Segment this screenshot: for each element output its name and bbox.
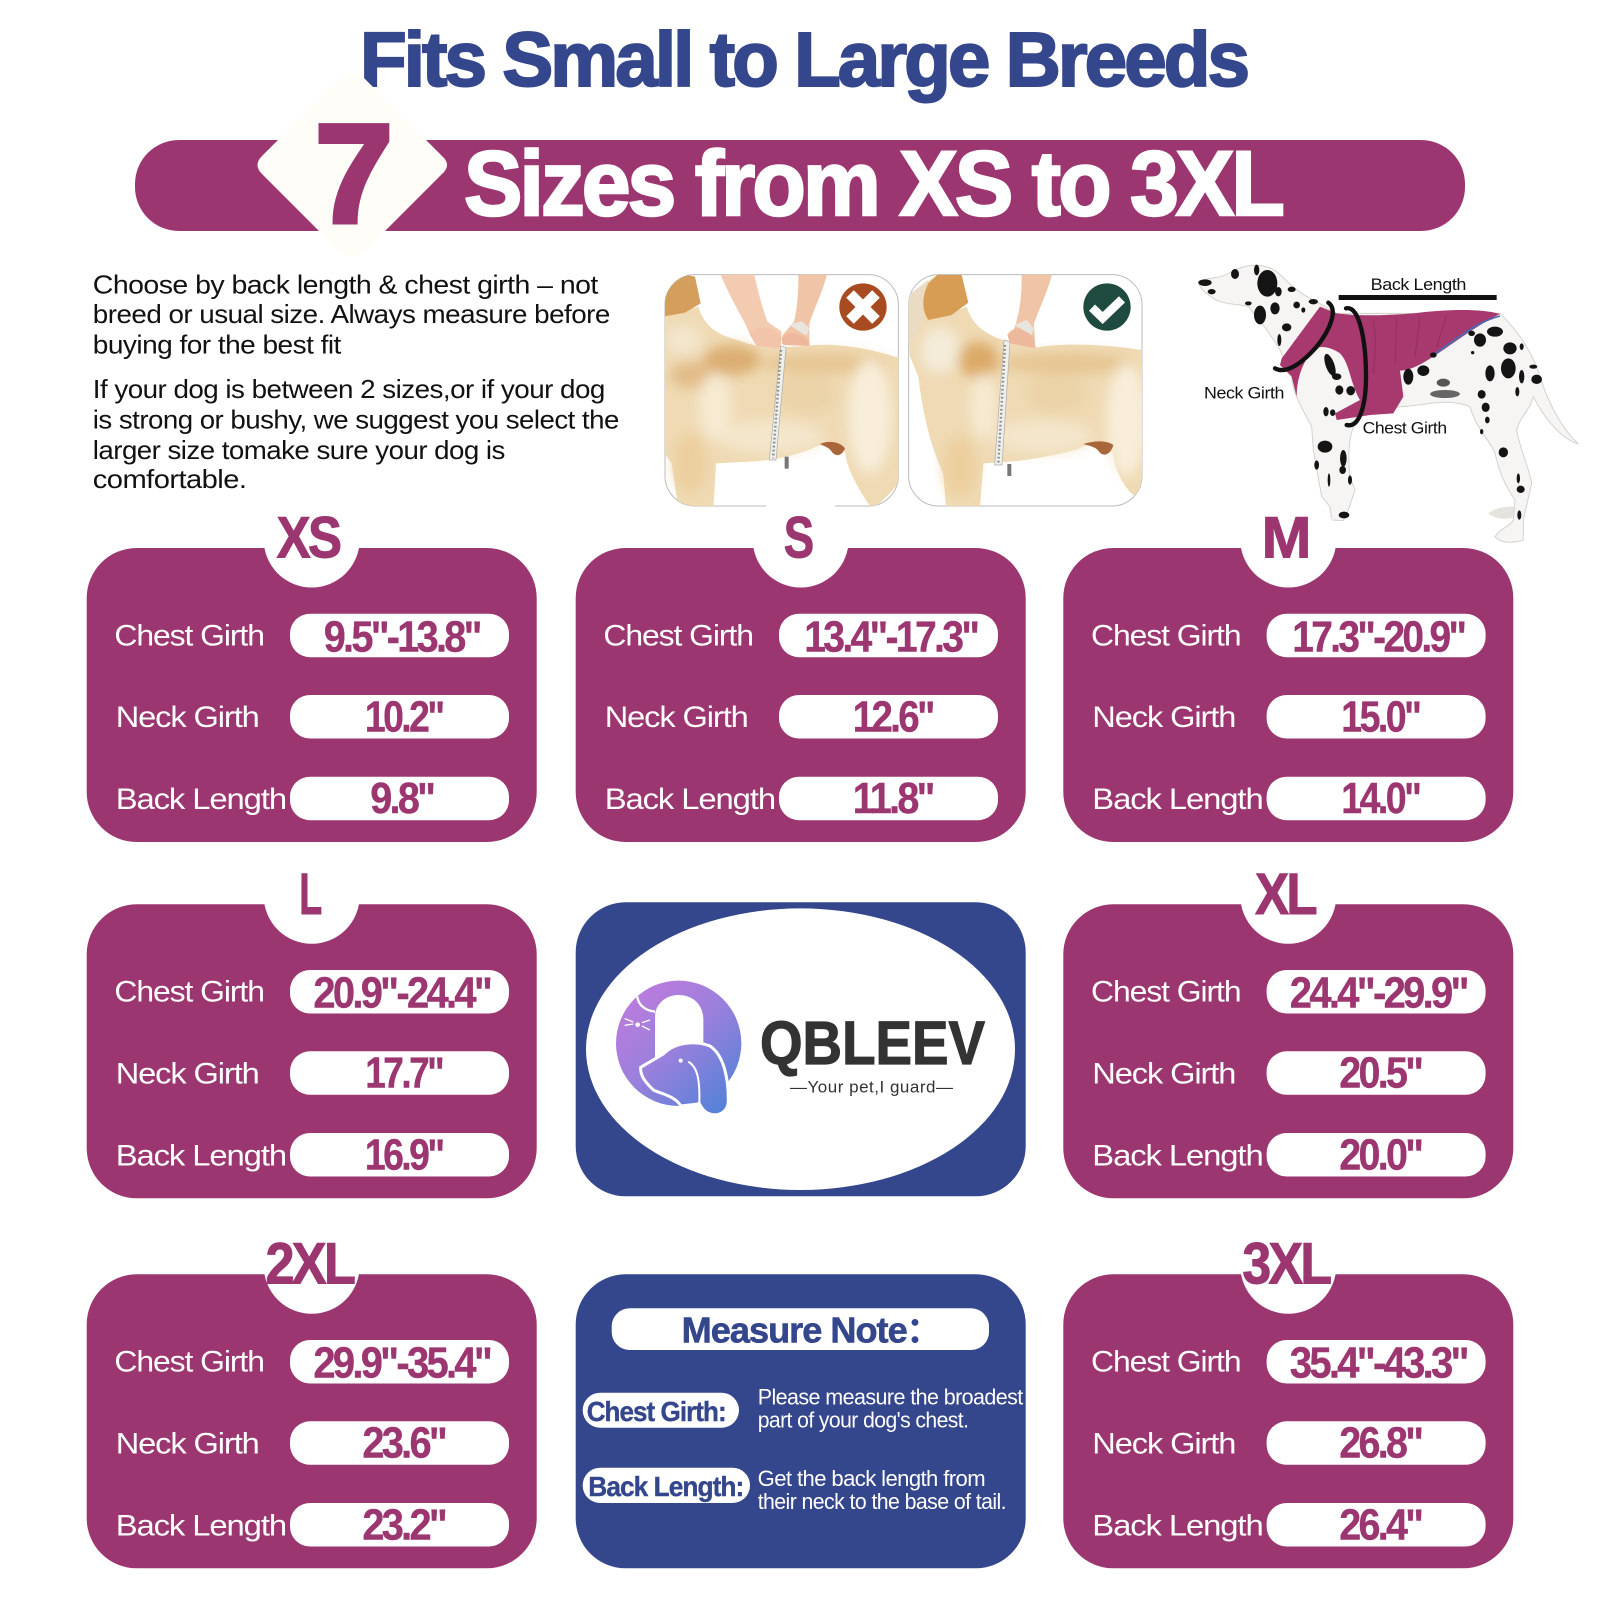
panel: XS	[87, 492, 537, 842]
tagline: —Your pet,I guard—	[790, 1078, 953, 1097]
panel: XL: 20.0"	[1339, 1130, 1421, 1179]
panel: 3XL: Neck Girth	[1092, 1427, 1235, 1460]
photo: dalmatian wearing coat with measure lines	[1198, 265, 1578, 542]
panel: 2XL	[87, 1218, 537, 1568]
intro text block	[93, 270, 619, 494]
dog label: chest girth: Chest Girth	[1363, 418, 1447, 437]
panel: S: 11.8"	[853, 774, 933, 823]
intro text block: larger size tomake sure your dog is	[93, 435, 505, 465]
chest girth note text: part of your dog's chest.	[758, 1408, 968, 1433]
panel: 3XL: Chest Girth	[1091, 1346, 1241, 1379]
chest girth note text: Please measure the broadest	[758, 1384, 1023, 1409]
back length note text	[758, 1466, 1006, 1514]
panel: 3XL: 35.4"-43.3"	[1290, 1339, 1467, 1388]
size label XS: XS	[277, 506, 341, 570]
back length line	[1339, 295, 1497, 300]
dog label: back length: Back Length	[1371, 275, 1466, 294]
panel: L: 16.9"	[365, 1130, 443, 1179]
panel: M: 15.0"	[1341, 692, 1419, 741]
photo: incorrect measuring	[660, 273, 903, 508]
intro text block: If your dog is between 2 sizes,or if your dog	[93, 374, 605, 404]
panel: XS: 9.8"	[370, 774, 433, 823]
panel: 2XL: 23.6"	[362, 1419, 445, 1468]
banner heading: Sizes from XS to 3XL	[464, 133, 1283, 235]
panel: S: Chest Girth	[603, 619, 753, 652]
panel: XS: Chest Girth	[114, 619, 264, 652]
back length note text: their neck to the base of tail.	[758, 1489, 1006, 1514]
measure note heading: ：	[906, 1310, 942, 1351]
intro text block: is strong or bushy, we suggest you select the	[93, 405, 619, 435]
photo: correct measuring	[907, 273, 1147, 508]
measure note heading: Measure Note	[682, 1310, 907, 1351]
big number 7: 7	[315, 95, 393, 252]
panel: M: Back Length	[1092, 783, 1263, 816]
panel: M: Neck Girth	[1092, 701, 1235, 734]
intro text block: buying for the best fit	[93, 330, 342, 360]
panel: XL: 20.5"	[1339, 1049, 1421, 1098]
dog label: neck girth: Neck Girth	[1204, 383, 1284, 402]
panel: M: Chest Girth	[1091, 619, 1241, 652]
panel: 3XL: Back Length	[1092, 1509, 1263, 1542]
size label 2XL: 2XL	[265, 1231, 355, 1296]
panel: M	[1063, 492, 1513, 842]
panel: M: 17.3"-20.9"	[1292, 612, 1464, 661]
title: Fits Small to Large Breeds	[360, 17, 1247, 103]
panel: XL: Back Length	[1092, 1139, 1263, 1172]
panel: L	[87, 848, 537, 1198]
back length note label: Back Length:	[588, 1471, 743, 1502]
panel: XS: 9.5"-13.8"	[324, 612, 480, 661]
size label 3XL: 3XL	[1242, 1231, 1331, 1296]
panel: 3XL: 26.8"	[1339, 1419, 1421, 1468]
intro text block: Choose by back length & chest girth – not	[93, 270, 599, 300]
panel: S: 13.4"-17.3"	[804, 612, 977, 661]
panel: 2XL: Neck Girth	[116, 1427, 259, 1460]
panel: 2XL: Chest Girth	[114, 1346, 264, 1379]
panel: measure note	[576, 1274, 1026, 1568]
panel: S: 12.6"	[853, 692, 933, 741]
panel: XS: Back Length	[116, 783, 286, 816]
badge: wrong	[839, 283, 887, 331]
panel: 3XL	[1063, 1218, 1513, 1568]
brand name: QBLEEV	[760, 1009, 985, 1077]
neck girth arc	[1275, 303, 1333, 370]
chest girth arc	[1346, 308, 1366, 425]
panel: brand logo	[576, 902, 1026, 1196]
chest girth note label: Chest Girth:	[587, 1396, 726, 1427]
panel: XS: Neck Girth	[116, 701, 259, 734]
chest girth note text	[758, 1384, 1023, 1433]
banner: 7 sizes from XS to 3XL	[135, 73, 1465, 257]
panel: S	[576, 492, 1026, 842]
panel: L: 17.7"	[365, 1049, 442, 1098]
intro text block: breed or usual size. Always measure before	[93, 299, 610, 329]
panel: S: Back Length	[605, 783, 775, 816]
panel: XS: 10.2"	[365, 692, 443, 741]
panel: S: Neck Girth	[605, 701, 748, 734]
panel: L: Chest Girth	[114, 976, 264, 1009]
panel: 2XL: 29.9"-35.4"	[313, 1339, 490, 1388]
dog coat	[1280, 307, 1500, 420]
panel: L: Back Length	[116, 1139, 286, 1172]
panel: XL: Chest Girth	[1091, 976, 1241, 1009]
icon: QBLEEV cat and dog logo	[616, 981, 741, 1115]
panel: XL	[1063, 848, 1513, 1198]
intro text block: comfortable.	[93, 464, 246, 494]
panel: M: 14.0"	[1341, 774, 1419, 823]
size label XL: XL	[1255, 862, 1316, 927]
size label M: M	[1262, 506, 1308, 570]
panel: L: 20.9"-24.4"	[313, 969, 490, 1018]
diamond badge	[258, 73, 447, 257]
panel: XL: 24.4"-29.9"	[1290, 969, 1467, 1018]
back length note text: Get the back length from	[758, 1466, 985, 1491]
size label S: S	[784, 506, 813, 570]
panel: 2XL: 23.2"	[362, 1500, 445, 1549]
size label L: L	[299, 862, 321, 927]
panel: 3XL: 26.4"	[1339, 1500, 1421, 1549]
panel: 2XL: Back Length	[116, 1509, 286, 1542]
panel: L: Neck Girth	[116, 1057, 259, 1090]
panel: XL: Neck Girth	[1092, 1057, 1235, 1090]
badge: correct	[1083, 283, 1131, 331]
